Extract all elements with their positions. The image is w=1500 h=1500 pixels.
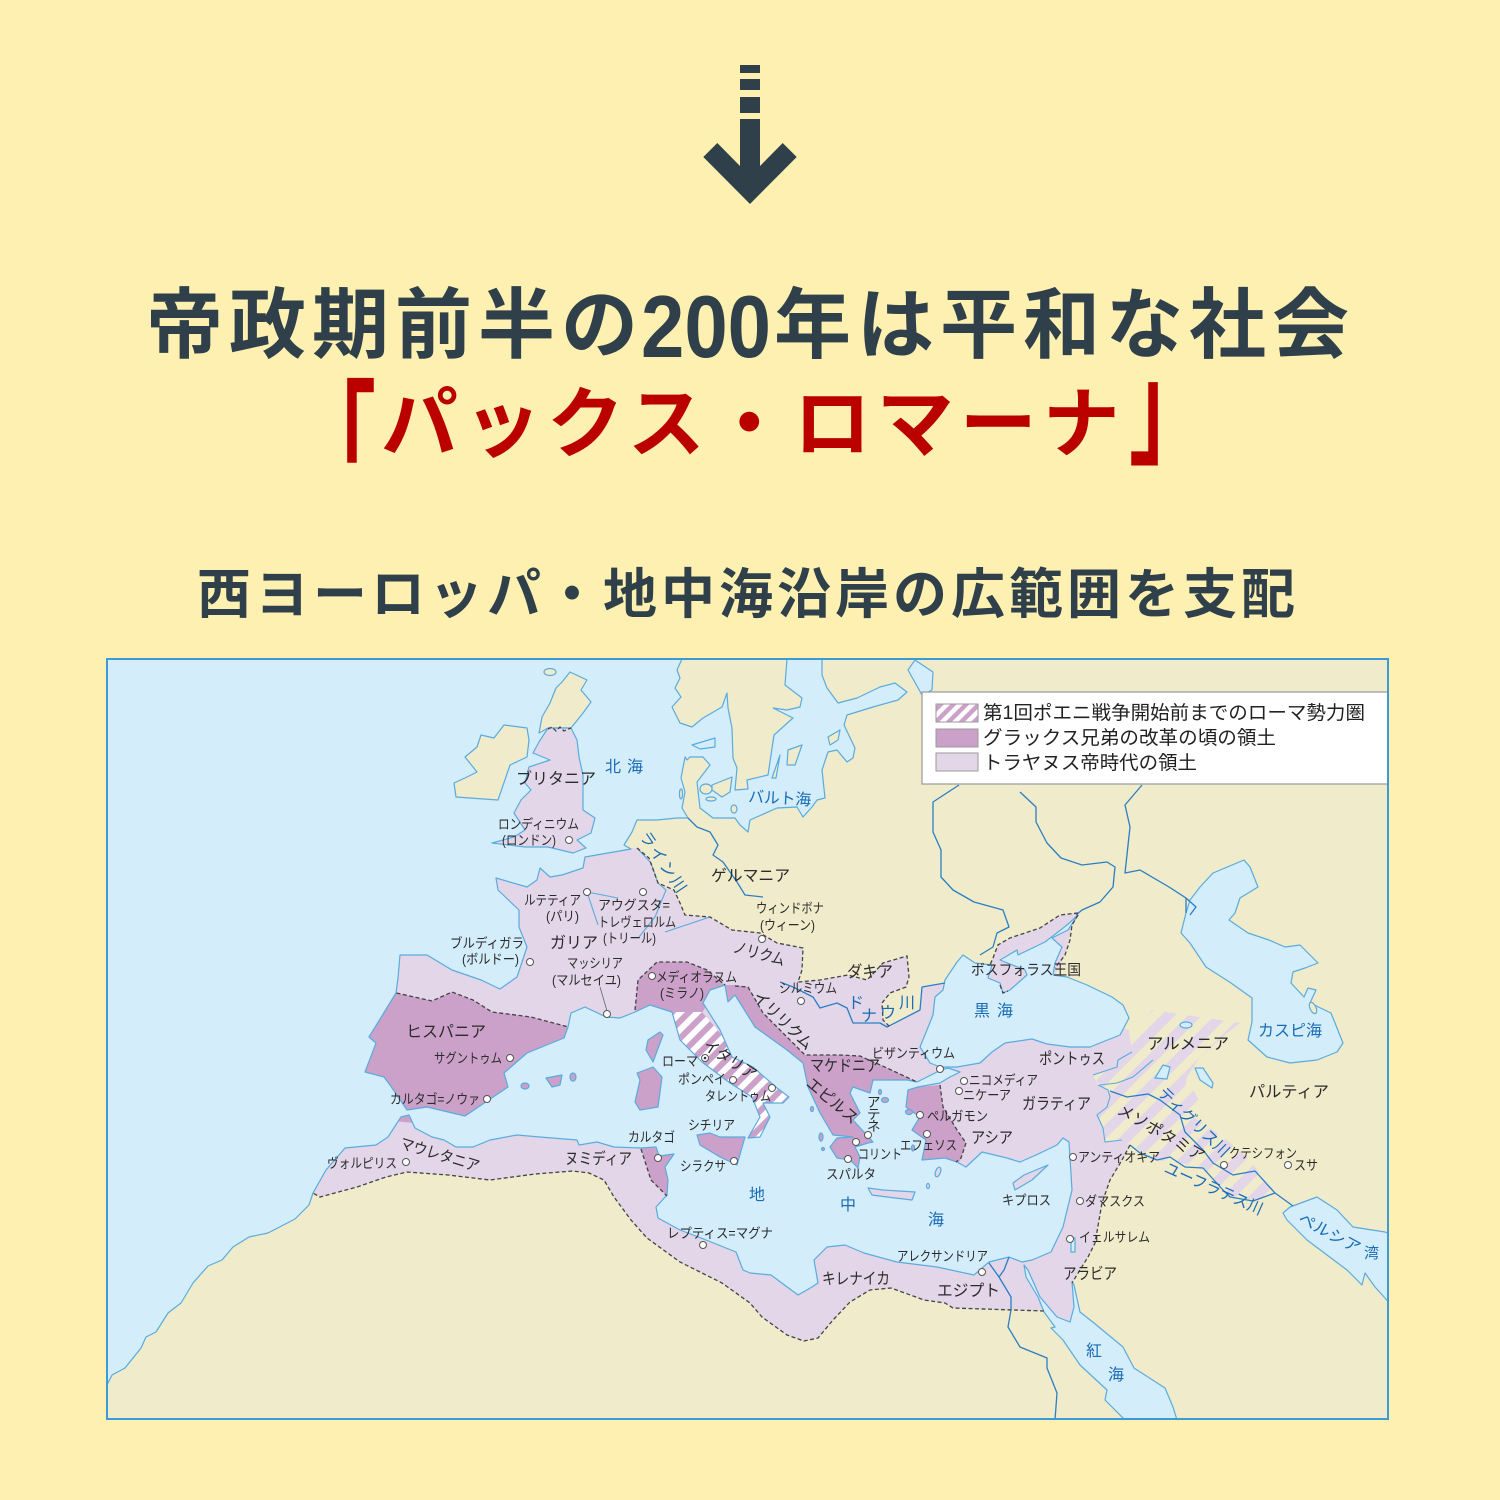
water body labels: カスピ海	[1258, 1022, 1322, 1040]
city labels: (ロンドン)	[502, 833, 556, 848]
territory: Armenia and Mesopotamia striped	[1093, 1010, 1273, 1200]
legend	[922, 692, 1390, 784]
water body labels: 紅	[1086, 1342, 1102, 1360]
city labels: ニコメディア	[969, 1072, 1038, 1088]
legend swatch: pre Punic War sphere	[936, 704, 978, 722]
water body labels: 北	[605, 758, 621, 776]
large region labels: ヒスパニア	[406, 1024, 486, 1041]
heading: second line in red	[296, 335, 1209, 520]
city labels: シチリア	[688, 1118, 735, 1133]
city labels: キプロス	[1002, 1193, 1051, 1208]
city labels: ア	[867, 1095, 880, 1110]
city labels	[327, 816, 1318, 1264]
legend text	[983, 702, 1365, 774]
city labels: スパルタ	[826, 1167, 876, 1182]
city labels: ウィンドボナ	[756, 901, 824, 916]
marseille leader line	[600, 987, 607, 1011]
water body labels	[605, 758, 1379, 1384]
water body labels: 海	[928, 1211, 944, 1229]
territory: Carthage	[641, 1148, 672, 1194]
legend text: トラヤヌス帝時代の領土	[983, 752, 1197, 774]
city labels: クテシフォン	[1229, 1146, 1297, 1161]
large region labels: ボスフォラス王国	[971, 962, 1081, 979]
city labels: (パリ)	[546, 909, 579, 924]
city labels: シラクサ	[680, 1159, 726, 1174]
rivers	[688, 785, 1293, 1420]
city labels: トレヴェロルム	[598, 914, 676, 930]
water body labels: 海	[627, 758, 643, 776]
heading: first line	[146, 277, 1355, 376]
territory: Hispania	[366, 992, 568, 1123]
icon: dashed down arrow	[703, 65, 797, 204]
city labels: ビザンティウム	[872, 1046, 955, 1061]
city labels: (ウィーン)	[760, 918, 815, 933]
land base	[107, 659, 1388, 1419]
large region labels: イタリア	[700, 1036, 760, 1084]
territory: Bosporan kingdom	[985, 913, 1078, 995]
water body labels: 地	[749, 1186, 765, 1204]
city labels: カルタゴ=ノウァ	[390, 1091, 480, 1107]
large region labels: メソポタミア	[1114, 1101, 1208, 1165]
territory: northern Italy	[635, 962, 724, 1012]
large region labels: キレナイカ	[822, 1271, 890, 1288]
water body labels: ライン川	[636, 829, 689, 896]
city labels: ローマ	[662, 1054, 698, 1069]
large region labels: ゲルマニア	[711, 867, 790, 885]
city labels: ペルガモン	[927, 1109, 988, 1124]
city labels: ネ	[867, 1119, 880, 1134]
city labels: (トリール)	[603, 931, 656, 946]
city labels: イェルサレム	[1079, 1230, 1150, 1245]
city labels: マッシリア	[567, 956, 623, 971]
legend text: 第1回ポエニ戦争開始前までのローマ勢力圏	[983, 702, 1365, 724]
water body labels: ウ	[880, 1004, 896, 1022]
city labels: ポンペイ	[678, 1072, 726, 1087]
legend swatch: Gracchi era territory	[936, 729, 978, 747]
large region labels	[398, 769, 1329, 1300]
city labels: メディオラヌム	[656, 969, 737, 985]
heading: first line: 200	[641, 277, 771, 376]
map panel	[107, 659, 1390, 1420]
territory: Italy before First Punic War	[673, 1012, 788, 1138]
city labels: (ボルドー)	[462, 952, 519, 967]
water body labels: 海	[997, 1002, 1013, 1020]
large region labels: ノリクム	[731, 938, 787, 970]
water body labels: ティグリス川	[1154, 1084, 1233, 1161]
city labels: ブルディガラ	[450, 935, 524, 951]
islands: eastern Mediterranean, light	[868, 1165, 1048, 1200]
city labels: アンティオキア	[1078, 1150, 1160, 1165]
city labels: (マルセイユ)	[552, 973, 621, 988]
large region labels: パルティア	[1249, 1084, 1329, 1101]
large region labels: エピルス	[802, 1075, 861, 1128]
large region labels: ブリタニア	[516, 769, 596, 788]
island: Roman Britain	[492, 728, 595, 853]
city labels: カルタゴ	[628, 1129, 675, 1145]
water body labels: ナ	[861, 1008, 877, 1025]
city labels: ルテティア	[524, 893, 581, 908]
large region labels: イリリクム	[749, 988, 816, 1054]
city labels: ダマスクス	[1085, 1194, 1145, 1209]
water body labels: ペルシア	[1295, 1211, 1363, 1257]
territory: Illyria and Greece	[725, 985, 917, 1175]
sea: Atlantic, North Sea, Baltic and Mediterranean	[107, 659, 1072, 1385]
water body labels: 海	[1108, 1366, 1124, 1384]
large region labels: ガラティア	[1022, 1095, 1091, 1113]
large region labels: ダキア	[847, 963, 893, 981]
water body labels: ユーフラテス川	[1161, 1160, 1265, 1219]
water body labels: ド	[848, 995, 864, 1012]
territorial border dashes	[313, 727, 1130, 1341]
heading: first line: 帝政期前半の	[146, 283, 644, 369]
large region labels: マウレタニア	[398, 1135, 482, 1176]
legend swatch: Trajan era territory	[936, 753, 978, 771]
water body labels: 湾	[1364, 1245, 1379, 1262]
city labels: シルミウム	[779, 981, 837, 996]
islands: western Mediterranean and Aegean, dark	[521, 1032, 914, 1165]
islands: Ireland, Scotland, Shetland, Baltic	[454, 668, 1318, 1015]
city labels: アレクサンドリア	[897, 1249, 988, 1264]
large region labels: マケドニア	[810, 1057, 880, 1075]
territory: western Anatolia	[906, 1085, 966, 1162]
city labels: ニケーア	[963, 1088, 1011, 1103]
sea: Black Sea and Azov	[920, 915, 1129, 1067]
sea: Persian Gulf	[1283, 1197, 1390, 1304]
lakes	[692, 660, 1213, 1252]
map frame	[107, 659, 1388, 1419]
water body labels: 川	[899, 995, 915, 1012]
city labels: スサ	[1294, 1158, 1318, 1173]
city labels: エフェソス	[900, 1138, 957, 1153]
sea: Red Sea	[1024, 1265, 1177, 1420]
heading: first line: 年は平和な社会	[774, 283, 1355, 369]
territory: Trajan era empire	[300, 848, 1132, 1341]
large region labels: アシア	[971, 1130, 1013, 1147]
city labels: ロンディニウム	[498, 816, 579, 832]
heading: second line in red: パックス・ロマーナ	[381, 382, 1126, 468]
large region labels: エジプト	[937, 1282, 1000, 1300]
city labels: テ	[867, 1107, 880, 1122]
city labels: サグントゥム	[434, 1051, 502, 1066]
city labels: ヴォルピリス	[327, 1155, 397, 1171]
large region labels: アラビア	[1063, 1265, 1117, 1283]
water body labels: バルト海	[748, 788, 812, 809]
subheading: 西ヨーロッパ・地中海沿岸の広範囲を支配	[197, 565, 1299, 625]
legend text: グラックス兄弟の改革の頃の領土	[983, 727, 1276, 749]
large region labels: アルメニア	[1147, 1036, 1229, 1053]
heading: second line in red: 」	[1129, 335, 1209, 481]
city labels: レプティス=マグナ	[667, 1226, 773, 1241]
city markers	[402, 836, 1292, 1276]
sea: Caspian	[1181, 860, 1343, 1063]
city labels: (ミラノ)	[660, 986, 704, 1001]
heading: second line in red: 「	[296, 372, 376, 520]
large region labels: ポントゥス	[1039, 1050, 1105, 1068]
city labels: アウグスタ=	[598, 898, 670, 913]
secondary rivers	[587, 848, 1153, 1142]
city labels: コリント	[858, 1147, 902, 1162]
water body labels: 黒	[974, 1003, 990, 1020]
water body labels: 中	[840, 1196, 856, 1214]
city labels: タレントゥム	[705, 1089, 771, 1104]
large region labels: ヌミディア	[565, 1149, 632, 1168]
large region labels: ガリア	[550, 934, 598, 952]
